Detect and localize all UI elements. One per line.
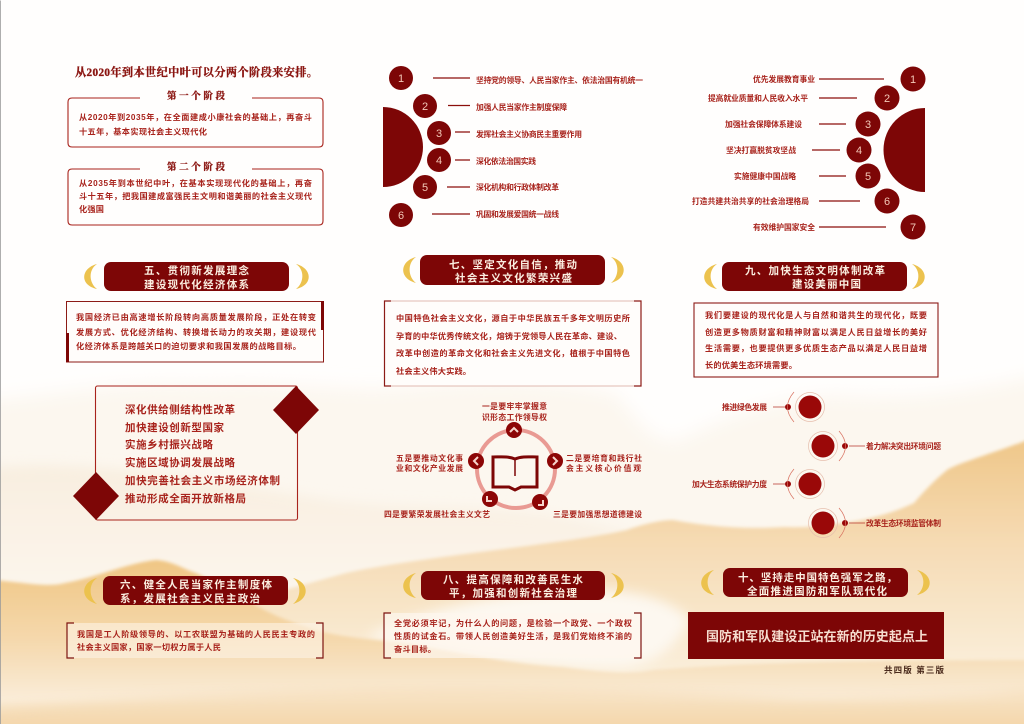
banner: section nine: 九、加快生态文明体制改革 — [745, 264, 886, 277]
ring diagram: culture — [384, 401, 642, 519]
ring diagram: culture: 识形态工作领导权 — [482, 412, 547, 422]
ring diagram: culture: 五是要推动文化事 — [396, 453, 463, 463]
banner: section seven: 社会主义文化繁荣兴盛 — [455, 272, 572, 284]
banner: section five: 建设现代化经济体系 — [144, 278, 249, 291]
ring diagram: culture: 三是要加强思想道德建设 — [553, 509, 642, 519]
numbered list: people's democracy: 2 — [422, 101, 428, 113]
banner: section ten: 十、坚持走中国特色强军之路， — [738, 571, 897, 584]
numbered list: people's democracy: 3 — [436, 128, 442, 140]
panel: second stage: 第二个阶段 — [167, 161, 225, 173]
text box: section five: 我国经济已由高速增长阶段转向高质量发展阶段，正处在转变 — [76, 312, 316, 322]
banner: section ten: 全面推进国防和军队现代化 — [747, 584, 888, 598]
banner: section seven — [403, 255, 624, 285]
banner: section five — [84, 262, 309, 291]
numbered list: people's wellbeing: 坚决打赢脱贫攻坚战 — [726, 145, 796, 155]
banner: section five: 五、贯彻新发展理念 — [144, 264, 250, 277]
numbered list: people's wellbeing: 1 — [910, 74, 916, 86]
text box: section nine: 生活需要，也要提供更多优质生态产品以满足人民日益增 — [705, 343, 927, 353]
text box: section nine: 长的优美生态环境需要。 — [705, 360, 797, 370]
icon: open book — [493, 457, 537, 490]
text box: section five — [66, 301, 324, 362]
numbered list: people's wellbeing: 5 — [865, 171, 871, 183]
panel: second stage: 斗十五年，把我国建成富强民主文明和谐美丽的社会主义现代 — [79, 191, 312, 201]
ring diagram: culture: 会主义核心价值观 — [566, 463, 641, 473]
page note: 共四版 第三版 — [884, 665, 944, 675]
ring diagram: culture: 一是要牢牢掌握意 — [482, 401, 547, 411]
numbered list: people's wellbeing: 实施健康中国战略 — [734, 171, 796, 181]
ring diagram: culture: 二是要培育和践行社 — [566, 453, 642, 463]
numbered list: people's wellbeing: 打造共建共治共享的社会治理格局 — [692, 196, 809, 206]
panel: first stage — [68, 90, 323, 147]
banner: section nine: 建设美丽中国 — [792, 278, 861, 290]
numbered list: people's wellbeing: 加强社会保障体系建设 — [725, 119, 802, 129]
panel: second stage — [68, 161, 323, 225]
panel: first stage: 第一个阶段 — [167, 90, 225, 102]
numbered list: people's wellbeing: 有效维护国家安全 — [753, 222, 815, 232]
numbered list: people's democracy: 加强人民当家作主制度保障 — [476, 102, 567, 112]
heading: two stages: 从2020年到本世纪中叶可以分两个阶段来安排。 — [75, 65, 318, 79]
numbered list: people's democracy: 坚持党的领导、人民当家作主、依法治国有机统一 — [476, 75, 643, 85]
numbered list: people's democracy: 5 — [422, 182, 428, 194]
banner: section eight: 八、提高保障和改善民生水 — [443, 573, 584, 586]
panel: second stage: 化强国 — [79, 204, 104, 214]
panel: first stage: 从2020年到2035年，在全面建成小康社会的基础上，再奋斗 — [79, 112, 312, 122]
numbered list: people's democracy — [383, 66, 643, 227]
text box: section eight: 奋斗目标。 — [394, 644, 436, 654]
panel: six economy measures: 实施乡村振兴战略 — [125, 438, 214, 451]
banner: section seven: 七、坚定文化自信，推动 — [449, 258, 577, 271]
panel: six economy measures: 深化供给侧结构性改革 — [125, 403, 236, 416]
numbered list: people's wellbeing: 7 — [910, 222, 916, 234]
panel: second stage: 从2035年到本世纪中叶，在基本实现现代化的基础上，再奋 — [79, 178, 313, 188]
diagram: ecology four measures: 着力解决突出环境问题 — [866, 441, 941, 451]
text box: section eight: 全党必须牢记，为什么人的问题，是检验一个政党、一个政权 — [394, 618, 632, 628]
numbered list: people's democracy: 深化依法治国实践 — [476, 156, 536, 166]
numbered list: people's wellbeing: 提高就业质量和人民收入水平 — [708, 93, 808, 103]
text box: section seven — [384, 301, 641, 386]
text box: section five: 化经济体系是跨越关口的迫切要求和我国发展的战略目标。 — [76, 341, 301, 351]
numbered list: people's wellbeing: 优先发展教育事业 — [753, 74, 815, 84]
numbered list: people's wellbeing — [692, 66, 926, 240]
banner: section nine — [704, 262, 925, 291]
panel: six economy measures — [73, 386, 319, 520]
numbered list: people's democracy: 1 — [398, 73, 404, 85]
banner: section six — [84, 576, 306, 605]
numbered list: people's wellbeing: 6 — [884, 196, 890, 208]
text box: section seven: 改革中创造的革命文化和社会主义先进文化，植根于中国特色 — [396, 348, 630, 358]
banner: section ten — [701, 568, 930, 598]
banner: section eight: 平，加强和创新社会治理 — [449, 586, 578, 600]
banner: section six: 系，发展社会主义民主政治 — [120, 592, 260, 605]
numbered list: people's wellbeing: 2 — [884, 93, 890, 105]
callout: national defence: 国防和军队建设正站在新的历史起点上 — [706, 629, 928, 644]
panel: six economy measures: 实施区域协调发展战略 — [125, 456, 236, 469]
diagram: ecology four measures: 推进绿色发展 — [722, 402, 767, 412]
numbered list: people's democracy: 4 — [436, 155, 442, 167]
diagram: ecology four measures: 加大生态系统保护力度 — [692, 479, 767, 489]
numbered list: people's democracy: 发挥社会主义协商民主重要作用 — [476, 129, 582, 139]
diagram: ecology four measures: 改革生态环境监管体制 — [866, 518, 941, 528]
text box: section nine: 我们要建设的现代化是人与自然和谐共生的现代化，既要 — [705, 310, 927, 320]
text box: section eight: 性质的试金石。带领人民创造美好生活，是我们党始终不渝的 — [394, 631, 632, 641]
text box: section seven: 中国特色社会主义文化，源自于中华民族五千多年文明历史所 — [396, 313, 630, 323]
numbered list: people's democracy: 巩固和发展爱国统一战线 — [476, 209, 559, 219]
panel: six economy measures: 加快建设创新型国家 — [125, 421, 224, 434]
text box: section seven: 孕育的中华优秀传统文化，熔铸于党领导人民在革命、建设、 — [396, 331, 622, 341]
banner: section six: 六、健全人民当家作主制度体 — [120, 578, 272, 591]
text box: section six — [67, 623, 323, 658]
numbered list: people's democracy: 深化机构和行政体制改革 — [476, 182, 559, 192]
panel: first stage: 十五年，基本实现社会主义现代化 — [79, 126, 207, 136]
banner: section eight — [403, 571, 624, 600]
panel: six economy measures: 加快完善社会主义市场经济体制 — [125, 474, 280, 487]
text box: section six: 社会主义国家，国家一切权力属于人民 — [77, 642, 221, 652]
text box: section seven: 社会主义伟大实践。 — [396, 366, 471, 376]
callout: national defence — [688, 612, 944, 659]
text box: section nine — [694, 303, 938, 377]
ring diagram: culture: 四是要繁荣发展社会主义文艺 — [384, 509, 490, 519]
ring diagram: culture: 业和文化产业发展 — [396, 463, 463, 473]
numbered list: people's wellbeing: 3 — [865, 119, 871, 131]
numbered list: people's wellbeing: 4 — [856, 145, 862, 157]
panel: six economy measures: 推动形成全面开放新格局 — [125, 492, 246, 505]
diagram: ecology four measures — [692, 392, 941, 538]
text box: section five: 发展方式、优化经济结构、转换增长动力的攻关期，建设现代 — [76, 327, 316, 337]
text box: section six: 我国是工人阶级领导的、以工农联盟为基础的人民民主专政的 — [77, 629, 315, 639]
text box: section eight — [384, 613, 641, 658]
numbered list: people's democracy: 6 — [398, 210, 404, 222]
text box: section nine: 创造更多物质财富和精神财富以满足人民日益增长的美好 — [705, 327, 927, 337]
